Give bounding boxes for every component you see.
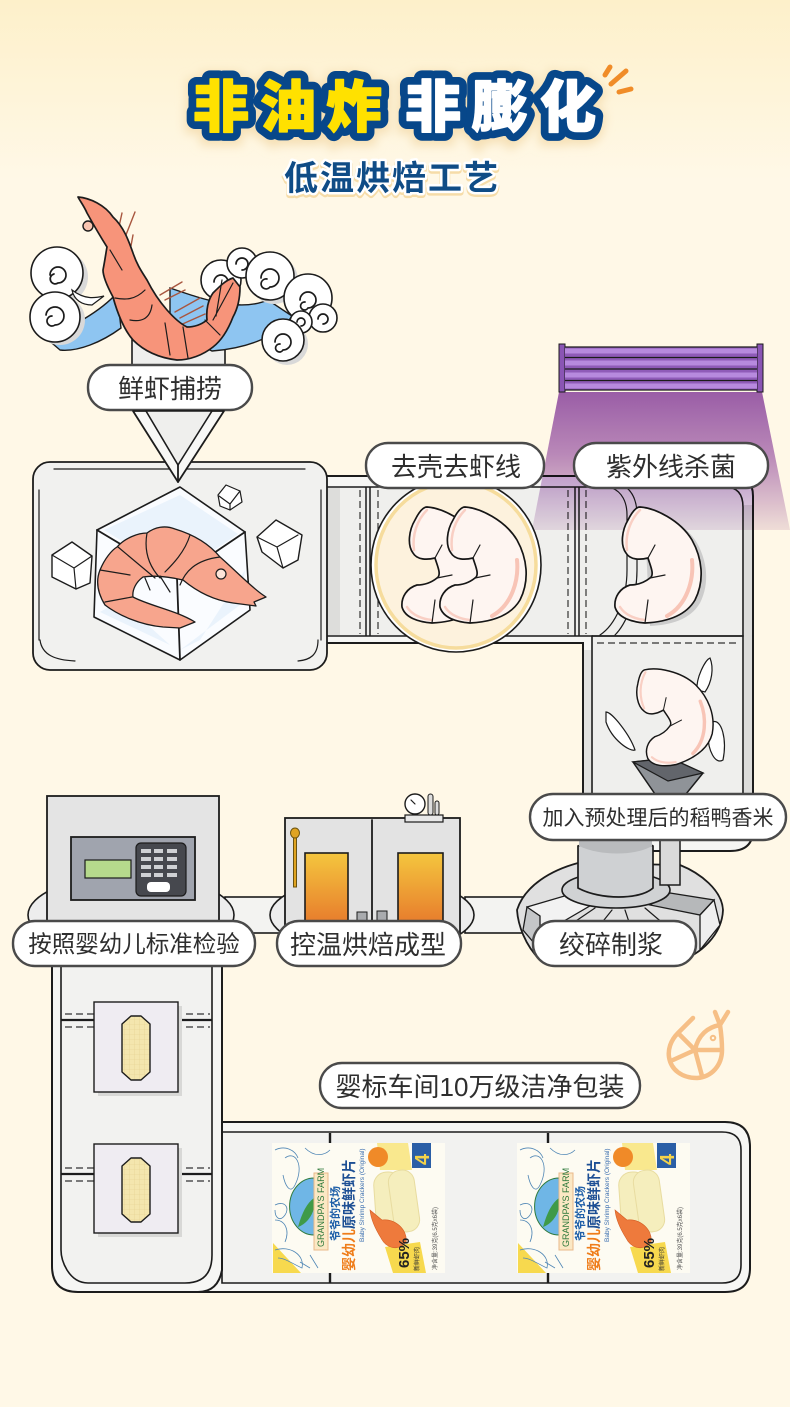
pill: peel: 去壳去虾线 [391, 452, 521, 482]
product pack 2: 4 [657, 1153, 679, 1165]
title: 非油炸 [193, 76, 382, 139]
rice grains [697, 658, 712, 692]
icon: accent marks [605, 67, 631, 92]
UV light beam [532, 392, 790, 530]
pill: grinding [533, 921, 696, 966]
wave left [46, 293, 121, 350]
oven [270, 794, 474, 953]
logo tag [314, 1173, 328, 1250]
real shrimp [370, 1210, 406, 1248]
hopper: top chute [132, 340, 225, 372]
pill: add rice: 加入预处理后的稻鸭香米 [542, 807, 774, 830]
orange badge [368, 1147, 388, 1167]
blue age badge [657, 1143, 676, 1168]
pill: inspection [13, 921, 255, 966]
net weight: 净含量:39克(6.5克x6袋) [431, 1207, 439, 1270]
globe [290, 1178, 314, 1235]
pill: inspection: 按照婴幼儿标准检验 [28, 931, 240, 957]
yellow panels [622, 1143, 657, 1170]
65%: 65% [396, 1238, 413, 1268]
frozen shrimp [98, 527, 266, 628]
blue age badge [412, 1143, 431, 1168]
wave right [170, 288, 292, 351]
cylinder [578, 840, 653, 897]
illustration: waves and clouds [30, 247, 337, 365]
crackers [373, 1168, 421, 1235]
pill: baking: 控温烘焙成型 [290, 930, 446, 960]
pill: peel [366, 443, 544, 488]
peeled shrimp back [402, 507, 488, 623]
illustration: fresh shrimp [78, 197, 240, 360]
product pack 1: 4 [412, 1153, 434, 1165]
clouds [30, 247, 337, 361]
hopper: funnel to freezer [133, 411, 224, 482]
real shrimp [615, 1210, 651, 1248]
logo tag [559, 1173, 573, 1250]
freezer box [33, 462, 327, 670]
globe [535, 1178, 559, 1235]
pill: fresh shrimp catch [88, 365, 252, 410]
antennae and legs [116, 212, 205, 326]
body [78, 197, 240, 360]
yellow panels [377, 1143, 412, 1170]
pill: packing [320, 1063, 640, 1108]
peeled shrimp under UV [615, 507, 706, 626]
connecting belts [225, 897, 525, 933]
tray 1 [94, 1002, 182, 1096]
side pipe [660, 840, 680, 885]
pill: add rice [530, 794, 786, 840]
oven windows [305, 853, 348, 925]
product pack 2 [517, 1143, 690, 1273]
product pack 2: GRANDPA'S FARM [561, 1168, 571, 1247]
pill: fresh shrimp catch: 鲜虾捕捞 [118, 374, 222, 404]
funnel [633, 758, 703, 794]
shrimp [624, 655, 723, 772]
pill: baking [277, 921, 461, 966]
brand name: 爷爷的农场 [328, 1186, 342, 1241]
icon: shrimp outline [669, 1012, 728, 1078]
thermometer [290, 828, 300, 887]
conveyor: packing belt [190, 1122, 750, 1292]
blue line art [275, 1148, 330, 1268]
pill: UV: 紫外线杀菌 [606, 452, 736, 482]
cloud shadows [35, 251, 308, 365]
UV lamp [559, 344, 763, 392]
blue line art [520, 1148, 575, 1268]
shrimp entering grinder [606, 655, 724, 794]
net weight: 净含量:39克(6.5克x6袋) [676, 1207, 684, 1270]
english name: Baby Shrimp Crackers (Original) [604, 1148, 611, 1242]
inspection machine [28, 796, 234, 955]
conveyor: upper belt [320, 476, 753, 851]
orange badge [613, 1147, 633, 1167]
knobs [357, 912, 367, 926]
product pack 1 [272, 1143, 445, 1273]
peeled shrimp front [440, 507, 526, 623]
ice block [94, 487, 250, 660]
ice cubes [52, 485, 302, 589]
product pack 1: 新鲜虾肉 [413, 1247, 421, 1271]
title: 非油炸 [193, 76, 382, 139]
title: 非膨化 [405, 79, 596, 142]
collar [562, 872, 670, 908]
gauge [405, 794, 443, 822]
pill: grinding: 绞碎制浆 [559, 930, 663, 960]
product pack 2: 新鲜虾肉 [658, 1247, 666, 1271]
65%: 65% [641, 1238, 658, 1268]
product name: 婴幼儿原味鲜虾片 [586, 1159, 602, 1271]
plate with peeled shrimp [371, 478, 541, 652]
title: 非膨化 [405, 76, 596, 139]
pill: UV [574, 443, 768, 488]
subtitle: 低温烘焙工艺 [284, 162, 498, 200]
eye [83, 221, 93, 231]
grinder [517, 840, 723, 960]
tray 2 [94, 1144, 182, 1237]
title: 非膨化 [405, 76, 596, 139]
product name: 婴幼儿原味鲜虾片 [341, 1159, 357, 1271]
pill: packing: 婴标车间10万级洁净包装 [336, 1072, 624, 1102]
english name: Baby Shrimp Crackers (Original) [359, 1148, 366, 1242]
crackers [618, 1168, 666, 1235]
control panel [71, 837, 195, 900]
title: 非油炸 [193, 79, 382, 142]
brand name: 爷爷的农场 [573, 1186, 587, 1241]
conveyor: lower vertical belt [52, 960, 222, 1292]
subtitle: 低温烘焙工艺 [284, 160, 498, 198]
shell segments [110, 250, 233, 358]
product pack 1: GRANDPA'S FARM [316, 1168, 326, 1247]
title [193, 76, 596, 142]
